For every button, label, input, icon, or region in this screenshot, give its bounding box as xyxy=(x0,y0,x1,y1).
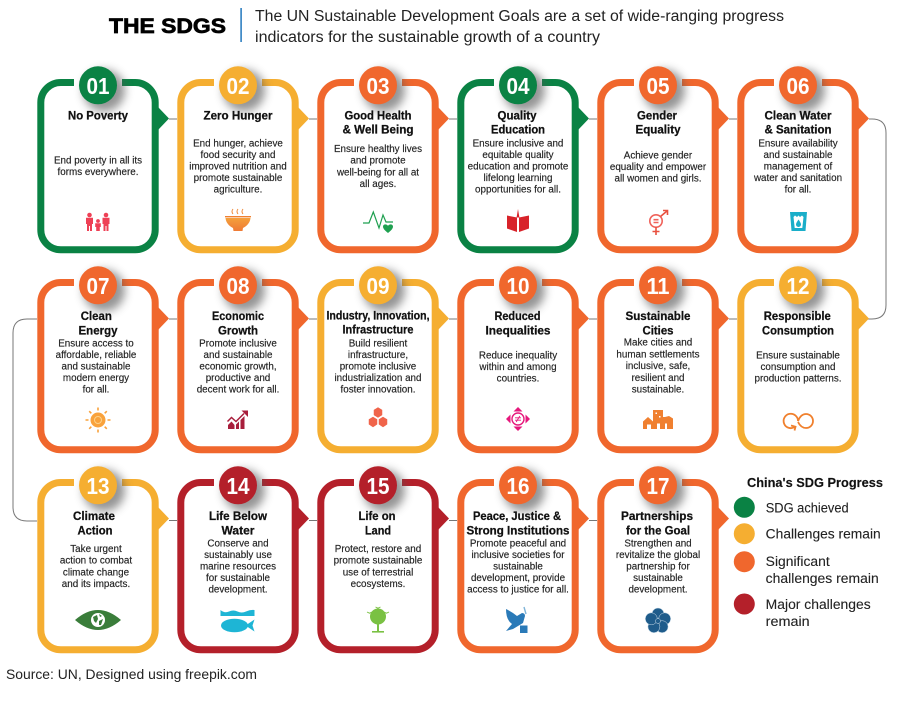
number: 14 xyxy=(226,473,250,499)
description: and sustainable xyxy=(764,150,833,161)
description: agriculture. xyxy=(214,185,262,196)
icon: flower knot xyxy=(645,608,671,633)
heading: Energy xyxy=(78,325,118,337)
description: industrialization and xyxy=(334,373,422,384)
description: for sustainable xyxy=(206,573,271,584)
description: forms everywhere. xyxy=(58,167,138,178)
panel: goal 14 Life Below Water xyxy=(181,466,309,650)
icon: soup bowl xyxy=(225,209,251,231)
heading: Cities xyxy=(642,325,674,337)
description: Take urgent xyxy=(70,544,122,555)
icon: inequality arrows xyxy=(506,407,530,431)
description: opportunities for all. xyxy=(475,185,561,196)
icon: family xyxy=(86,213,110,231)
description: Build resilient xyxy=(349,338,408,349)
description: for all. xyxy=(83,385,109,396)
icon: fish and waves xyxy=(220,610,254,632)
icon: growth chart xyxy=(228,410,248,429)
description: Protect, restore and xyxy=(335,544,421,555)
description: ecosystems. xyxy=(351,579,405,590)
source note: Source: UN, Designed using freepik.com xyxy=(6,666,257,682)
description: and sustainable xyxy=(204,350,273,361)
legend xyxy=(734,475,883,629)
heading: Clean Water xyxy=(764,110,832,122)
panel: goal 05 Gender Equality xyxy=(601,66,729,250)
description: for all. xyxy=(785,185,811,196)
heading: Zero Hunger xyxy=(204,110,273,122)
description: and its impacts. xyxy=(62,579,130,590)
panel: goal 09 Industry xyxy=(321,266,449,450)
panel: goal 16 Peace and Justice xyxy=(461,466,589,650)
number: 08 xyxy=(226,273,250,299)
legend: SDG achieved xyxy=(734,497,849,518)
icon: water glass xyxy=(790,212,807,231)
description: sustainable xyxy=(493,562,543,572)
heading: Consumption xyxy=(762,325,834,337)
panel: goal 07 Clean Energy xyxy=(41,266,169,450)
legend: significant challenges remain: challenges remain xyxy=(766,571,879,586)
description: Promote inclusive xyxy=(199,338,277,349)
heading: Land xyxy=(365,525,391,537)
number: 03 xyxy=(366,73,390,99)
panel: goal 01 No Poverty xyxy=(41,66,169,250)
description: sustainably use xyxy=(204,550,272,561)
description: Ensure access to xyxy=(58,338,134,349)
description: foster innovation. xyxy=(341,385,415,396)
description: equality and empower xyxy=(610,162,707,173)
heading: Gender xyxy=(637,110,678,122)
subtitle: indicators for the sustainable growth of a country xyxy=(255,29,600,46)
description: inclusive, safe, xyxy=(626,361,690,372)
panel: goal 06 Clean Water xyxy=(741,66,869,250)
heading: Industry, Innovation, xyxy=(326,311,430,323)
description: Strengthen and xyxy=(624,538,692,549)
heading: & Sanitation xyxy=(764,125,832,137)
icon: gender symbol xyxy=(650,210,668,235)
description: development, provide xyxy=(471,573,566,584)
number: 17 xyxy=(646,473,670,499)
description: Ensure availability xyxy=(758,138,838,149)
description: modern energy xyxy=(63,373,129,384)
number: 13 xyxy=(86,473,110,499)
panel: goal 04 Quality Education xyxy=(461,66,589,250)
description: promote sustainable xyxy=(194,173,283,184)
description: Reduce inequality xyxy=(479,350,557,361)
legend: challenges remain xyxy=(734,523,881,544)
description: Achieve gender xyxy=(624,150,693,161)
description: economic growth, xyxy=(199,362,277,372)
panel: goal 11 Sustainable Cities xyxy=(601,266,729,450)
description: Ensure sustainable xyxy=(756,350,840,361)
description: well-being for all at xyxy=(336,167,419,178)
icon: cubes xyxy=(368,407,388,428)
description: End poverty in all its xyxy=(54,156,142,166)
panel: goal 08 Economic Growth xyxy=(181,266,309,450)
description: infrastructure, xyxy=(348,350,408,361)
description: all women and girls. xyxy=(614,174,702,184)
panel: goal 03 Good Health xyxy=(321,66,449,250)
description: use of terrestrial xyxy=(343,567,413,578)
legend: challenges remain: Challenges remain xyxy=(766,526,881,542)
number: 11 xyxy=(646,273,670,299)
panel: goal 17 Partnerships xyxy=(601,466,729,650)
description: all ages. xyxy=(360,179,396,190)
icon: infinity loop xyxy=(784,414,813,430)
heading: Water xyxy=(222,525,255,537)
description: production patterns. xyxy=(754,374,842,384)
panel: goal 12 Responsible Consumption xyxy=(741,266,869,450)
description: and sustainable xyxy=(62,362,131,372)
description: development. xyxy=(628,585,688,596)
heading: Infrastructure xyxy=(342,324,414,336)
description: lifelong learning xyxy=(484,173,552,184)
heading: Education xyxy=(491,125,545,137)
description: decent work for all. xyxy=(197,385,279,396)
description: education and promote xyxy=(468,162,569,172)
icon: tree xyxy=(367,607,389,633)
heading: Responsible xyxy=(764,311,831,323)
description: Ensure inclusive and xyxy=(473,138,563,149)
description: and promote xyxy=(350,156,406,167)
description: productive and xyxy=(206,373,270,384)
description: sustainable xyxy=(633,573,683,584)
heading: Quality xyxy=(498,110,537,122)
panel: goal 15 Life on Land xyxy=(321,466,449,650)
description: development. xyxy=(208,585,268,596)
number: 05 xyxy=(646,73,670,99)
legend: significant challenges remain: Significant xyxy=(766,554,830,569)
legend: major challenges remain: Major challenges xyxy=(766,597,871,612)
description: water and sanitation xyxy=(753,173,842,184)
connector lines between cards xyxy=(13,119,886,521)
description: climate change xyxy=(63,567,130,578)
legend: major challenges remain xyxy=(734,594,871,629)
description: human settlements xyxy=(616,349,700,360)
panel: goal 10 Reduced Inequalities xyxy=(461,266,589,450)
heading: Sustainable xyxy=(626,311,690,323)
description: management of xyxy=(764,162,832,172)
description: partnership for xyxy=(626,562,690,572)
heading: Life on xyxy=(358,511,396,523)
description: equitable quality xyxy=(482,150,554,161)
heading: Growth xyxy=(218,325,258,337)
icon: heartbeat xyxy=(363,212,393,233)
number: 09 xyxy=(366,273,390,299)
number: 12 xyxy=(786,273,810,299)
number: 16 xyxy=(506,473,530,499)
number: 02 xyxy=(226,73,250,99)
description: action to combat xyxy=(60,556,132,567)
panel: goal 13 Climate Action xyxy=(41,466,169,650)
description: promote inclusive xyxy=(340,362,417,372)
description: Ensure healthy lives xyxy=(334,144,422,155)
description: Conserve and xyxy=(207,538,269,549)
title: THE SDGS xyxy=(109,15,226,38)
icon: earth eye xyxy=(75,610,121,630)
heading: Good Health xyxy=(344,110,412,122)
heading: for the Goal xyxy=(626,525,690,537)
number: 04 xyxy=(506,73,530,99)
description: improved nutrition and xyxy=(189,162,287,172)
heading: Reduced xyxy=(494,311,540,323)
description: Promote peaceful and xyxy=(470,538,566,549)
heading: Clean xyxy=(81,311,112,323)
number: 15 xyxy=(366,473,390,499)
legend: major challenges remain: remain xyxy=(766,614,810,629)
description: Make cities and xyxy=(624,338,692,349)
heading: Economic xyxy=(212,311,265,323)
heading: Action xyxy=(78,525,112,537)
description: within and among xyxy=(478,362,557,373)
heading: Peace, Justice & xyxy=(473,511,561,523)
subtitle: The UN Sustainable Development Goals are a set of wide-ranging progress xyxy=(255,8,784,25)
icon: sun xyxy=(86,408,110,432)
heading: Inequalities xyxy=(486,325,550,337)
description: food security and xyxy=(201,150,275,161)
legend: significant challenges remain xyxy=(734,551,879,586)
icon: city buildings xyxy=(643,410,673,429)
number: 10 xyxy=(506,273,530,299)
heading: Life Below xyxy=(209,511,267,523)
description: End hunger, achieve xyxy=(193,138,283,149)
description: inclusive societies for xyxy=(471,550,565,561)
description: access to justice for all. xyxy=(467,585,569,596)
number: 07 xyxy=(86,273,110,299)
heading: No Poverty xyxy=(68,110,129,122)
description: resilient and xyxy=(631,373,685,384)
heading: Strong Institutions xyxy=(466,525,570,537)
icon: book xyxy=(507,209,529,232)
heading: Equality xyxy=(636,125,681,137)
description: affordable, reliable xyxy=(56,350,137,361)
number: 01 xyxy=(86,73,110,99)
legend heading: China's SDG Progress xyxy=(747,475,883,490)
icon: dove xyxy=(506,607,528,633)
panel: goal 02 Zero Hunger xyxy=(181,66,309,250)
description: countries. xyxy=(497,374,539,384)
heading: Climate xyxy=(73,511,115,523)
description: sustainable. xyxy=(632,385,684,396)
description: consumption and xyxy=(761,362,835,373)
legend: SDG achieved: SDG achieved xyxy=(766,500,849,516)
heading: Partnerships xyxy=(621,511,693,523)
heading: & Well Being xyxy=(342,125,414,137)
description: marine resources xyxy=(200,562,276,572)
description: promote sustainable xyxy=(334,556,423,567)
description: revitalize the global xyxy=(616,550,700,561)
number: 06 xyxy=(786,73,810,99)
